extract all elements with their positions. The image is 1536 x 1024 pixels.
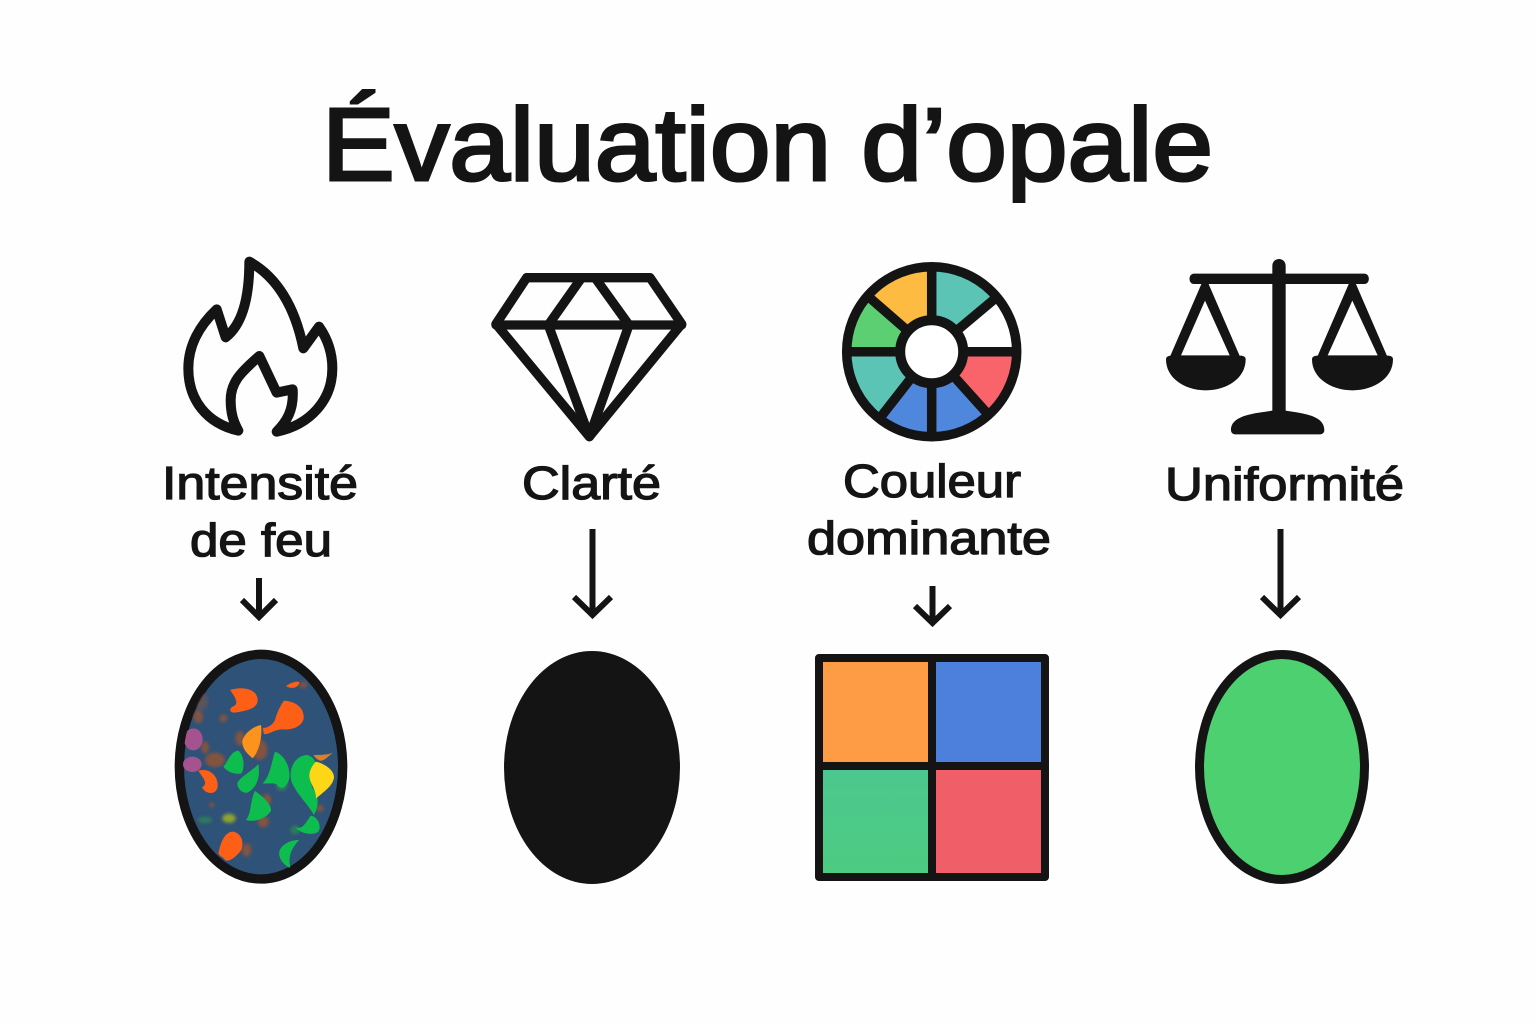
opal: green	[1200, 654, 1364, 880]
arrow	[915, 586, 950, 623]
icon: flame	[188, 262, 332, 432]
arrow	[574, 529, 611, 615]
color swatch grid	[819, 658, 1045, 877]
label: Couleur dominante: dominante	[807, 512, 1051, 564]
label: Intensité de feu	[162, 457, 358, 566]
column: intensité de feu	[162, 262, 358, 879]
opal: black	[504, 651, 680, 884]
arrow	[242, 578, 276, 617]
infographic canvas	[166, 89, 1402, 884]
column: couleur dominante	[807, 267, 1051, 877]
column: clarté	[496, 278, 682, 884]
label: Uniformité: Uniformité	[1165, 458, 1404, 510]
icon: balance scale	[1166, 259, 1393, 434]
opal: multicolored fire	[179, 654, 343, 879]
label: Intensité de feu: Intensité	[162, 457, 358, 509]
icon: diamond	[496, 278, 682, 437]
column: uniformité	[1165, 259, 1404, 880]
label: Clarté: Clarté	[522, 457, 661, 509]
label: Couleur dominante: Couleur	[843, 455, 1021, 507]
label: Couleur dominante	[807, 455, 1051, 564]
label: Intensité de feu: de feu	[190, 514, 332, 566]
icon: color wheel	[847, 267, 1017, 437]
arrow	[1262, 529, 1299, 615]
title: Évaluation d’opale	[322, 87, 1213, 202]
